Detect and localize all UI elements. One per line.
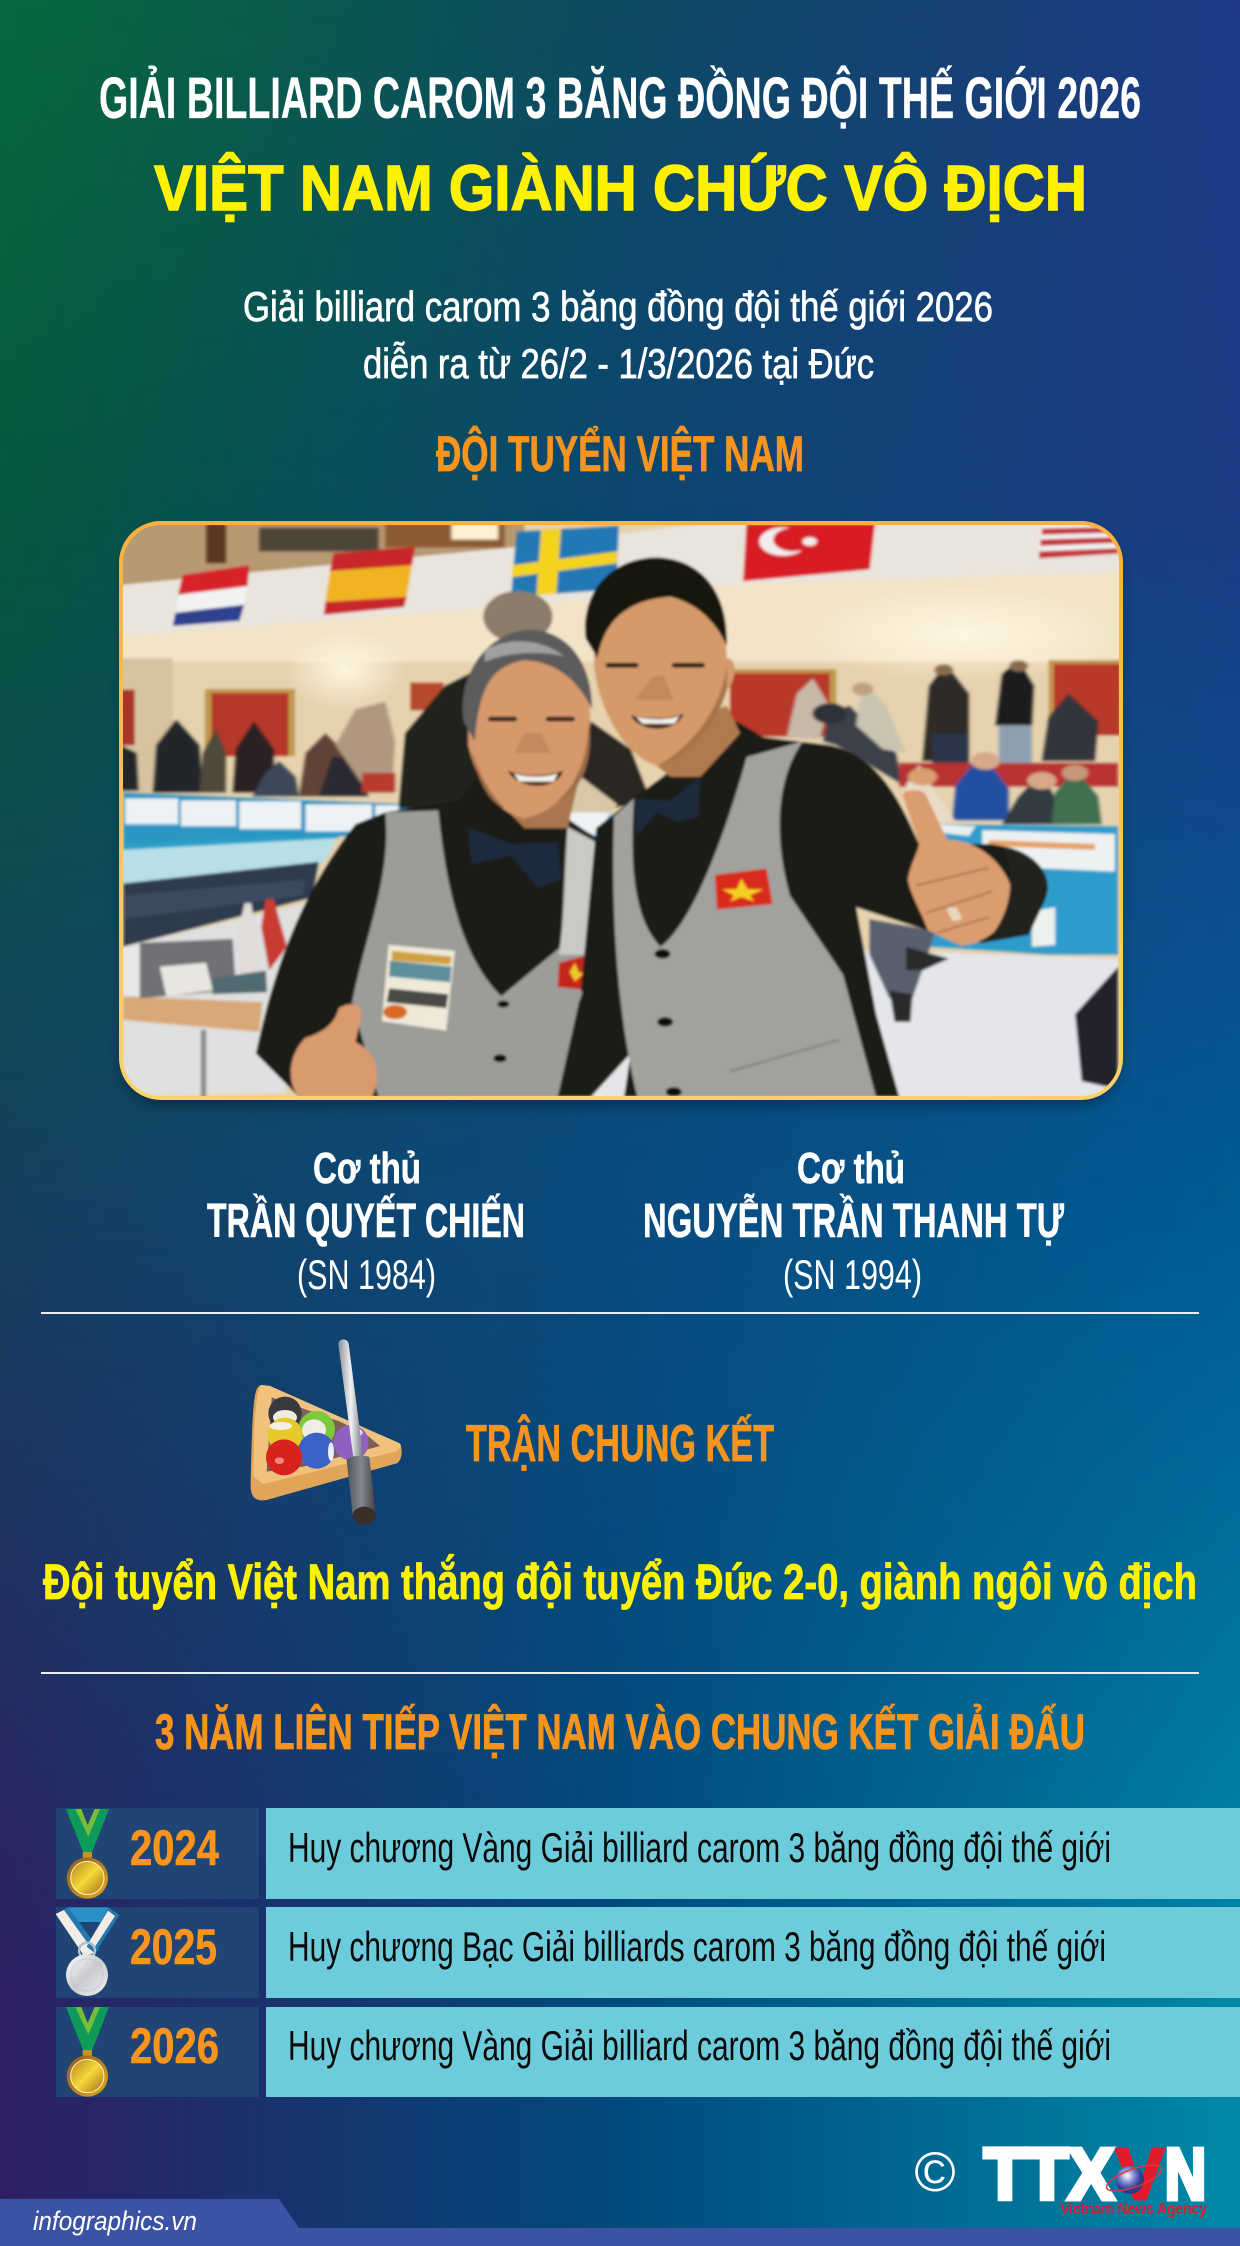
player 2 caption: Cơ thủ (797, 1144, 905, 1193)
photo panel: two players (100, 516, 1161, 1109)
player 1 caption: Cơ thủ (313, 1144, 421, 1193)
logo: TTXVN: V (1116, 2135, 1164, 2215)
logo: TTXVN: TTX (984, 2135, 1114, 2215)
banner and ceiling (123, 525, 1119, 637)
row 2026 (56, 2007, 1240, 2097)
flags (173, 524, 1118, 626)
headline: VIỆT NAM GIÀNH CHỨC VÔ ĐỊCH (154, 151, 1087, 224)
right player: Nguyễn Trần Thanh Tự (581, 557, 1048, 1097)
billiard table (123, 834, 339, 886)
icon: gold medal (66, 1809, 109, 1899)
year: 2024 (130, 1820, 219, 1876)
player 1 caption (207, 1144, 525, 1298)
crowd (120, 660, 1118, 824)
logo: TTXVN: N (1165, 2135, 1206, 2215)
row 2025 (56, 1907, 1240, 1998)
upper wall and balcony (100, 516, 1161, 1109)
footer band (0, 2199, 1240, 2246)
intro text: Giải billiard carom 3 băng đồng đội thế giới 2026 (243, 283, 993, 330)
footer site label: infographics.vn (33, 2206, 197, 2236)
player 1 caption: TRẦN QUYẾT CHIẾN (207, 1194, 525, 1248)
heading: team: ĐỘI TUYỂN VIỆT NAM (436, 425, 804, 482)
row 2024 (56, 1808, 1240, 1899)
year: 2026 (130, 2018, 219, 2074)
player 2 caption: (SN 1994) (783, 1251, 922, 1298)
logo: TTXVN: Vietnam News Agency (1060, 2201, 1207, 2218)
logo: TTXVN (984, 2135, 1207, 2218)
heading: final: TRẬN CHUNG KẾT (466, 1414, 774, 1473)
left player: Trần Quyết Chiến (256, 630, 631, 1097)
icon: billiard rack and cue (251, 1339, 402, 1525)
floor (591, 947, 1118, 1097)
icon: gold medal (66, 2007, 109, 2097)
side table (123, 996, 263, 1032)
barriers (123, 591, 1118, 1097)
player 2 caption (643, 1144, 1064, 1298)
background man (398, 666, 491, 808)
year: 2025 (130, 1919, 217, 1975)
doors (120, 660, 1121, 756)
player 1 caption: (SN 1984) (297, 1251, 436, 1298)
icon: silver medal (56, 1907, 119, 1996)
intro text: diễn ra từ 26/2 - 1/3/2026 tại Đức (363, 340, 874, 387)
copyright mark: © (914, 2140, 956, 2203)
intro text (243, 283, 993, 387)
